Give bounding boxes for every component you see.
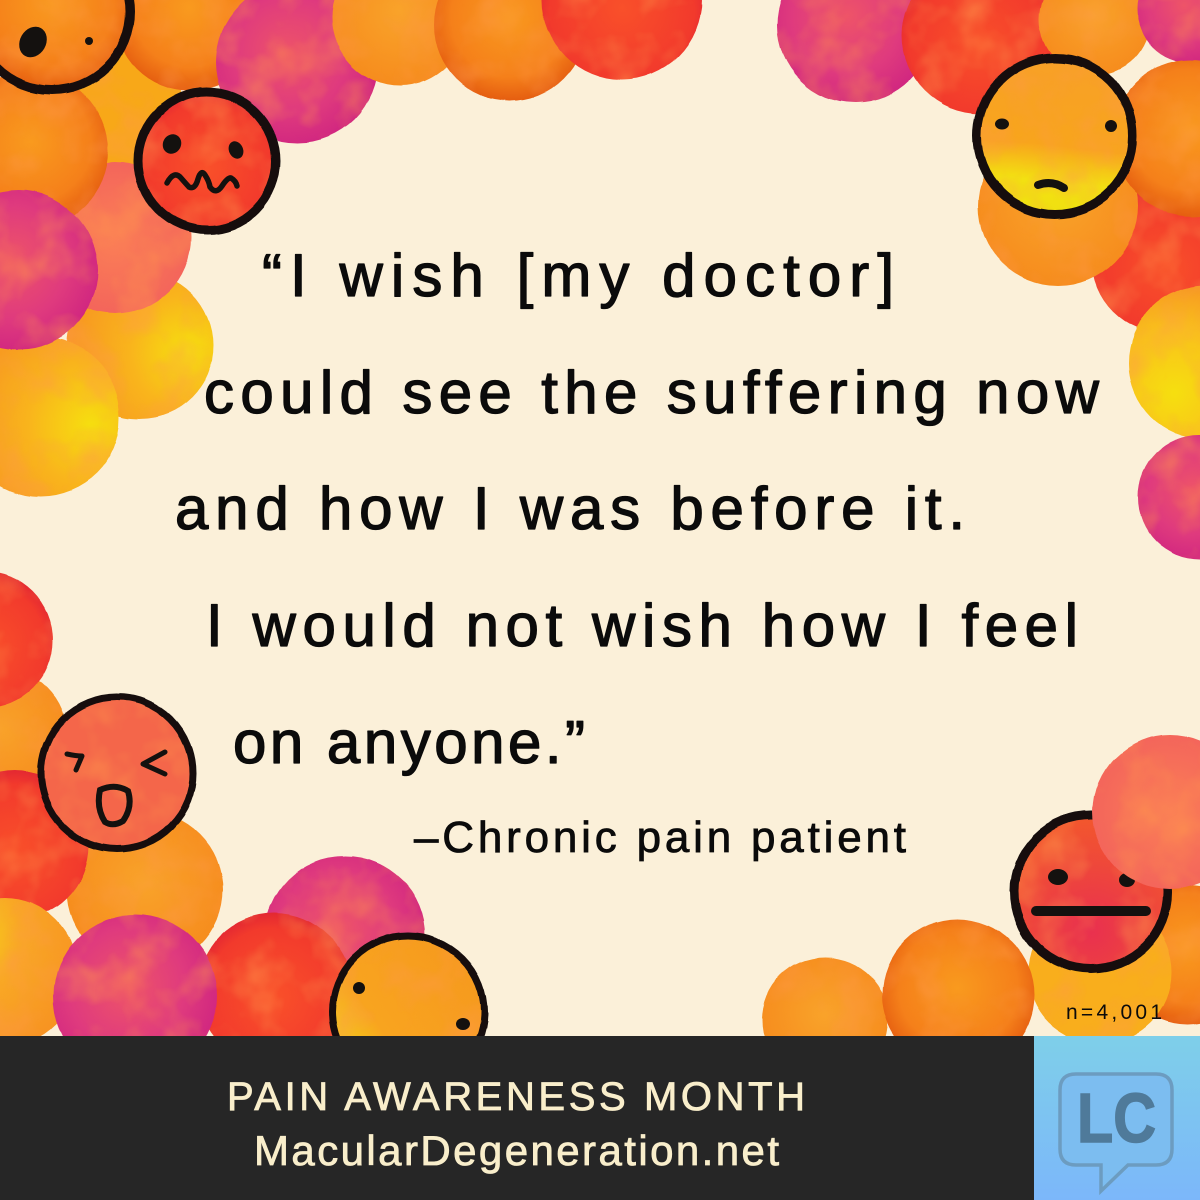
quote text: I would not wish how I feel bbox=[206, 592, 1078, 659]
watercolor blobs: bottom right bbox=[762, 885, 1200, 1083]
quote text bbox=[175, 242, 1100, 776]
face: frowning, top right bbox=[975, 56, 1135, 216]
quote text: “I wish [my doctor] bbox=[262, 242, 894, 309]
LC speech bubble logo bbox=[1060, 1074, 1172, 1191]
blob overlapping the flat-mouth face bbox=[1093, 735, 1200, 889]
face: bottom centre, cropped bbox=[331, 935, 485, 1089]
watercolor blobs: bottom left bbox=[0, 572, 425, 1078]
watercolor blobs: top right and right edge bbox=[777, 0, 1200, 559]
logo panel bbox=[1034, 1036, 1200, 1200]
footer website: MacularDegeneration.net bbox=[254, 1127, 779, 1174]
footer heading: PAIN AWARENESS MONTH bbox=[227, 1075, 805, 1119]
quote text: and how I was before it. bbox=[175, 475, 965, 542]
quote text: on anyone.” bbox=[233, 709, 585, 776]
face: top left, partly cropped bbox=[0, 0, 131, 91]
LC speech bubble logo: LC bbox=[1077, 1079, 1156, 1157]
sample size note: n=4,001 bbox=[1066, 1001, 1162, 1024]
watercolor blobs: top centre bbox=[332, 0, 702, 101]
face: wavy mouth bbox=[137, 91, 277, 231]
footer bar bbox=[0, 1036, 1200, 1200]
face: flat mouth, bottom right bbox=[1013, 814, 1169, 970]
quote text: could see the suffering now bbox=[204, 359, 1100, 426]
watercolor blobs: top left bbox=[0, 0, 378, 497]
attribution: –Chronic pain patient bbox=[414, 813, 906, 862]
face: crying out, lower left bbox=[40, 696, 194, 850]
